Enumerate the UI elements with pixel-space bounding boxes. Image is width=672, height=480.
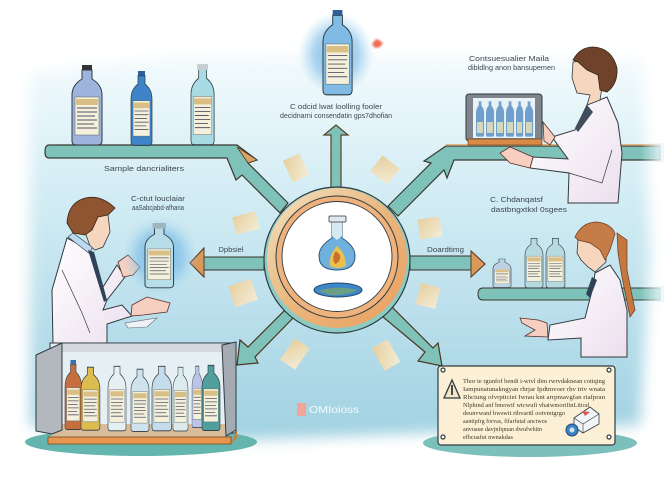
warning text: anvuaue davjnfqman dwufwhitn — [463, 426, 542, 433]
background wash — [30, 54, 650, 440]
icon: dish — [314, 283, 362, 297]
caption: sample: Sample dancrialiters — [104, 164, 184, 173]
icon: flask — [319, 216, 355, 270]
caption: top: C odcid lwat loolling fooler — [290, 102, 383, 111]
caption: top: decidnarni consendatin gps7dhofian — [280, 111, 392, 120]
caption: left bottle — [131, 194, 186, 212]
arrow: lower right — [383, 307, 442, 366]
shelf arrow: top right — [388, 143, 664, 216]
caption: right arrow: Doardtimg — [427, 245, 464, 254]
icon: instrument box — [566, 407, 599, 436]
bottles: top left shelf — [72, 64, 214, 145]
caption: left bottle: aaSabcjabd-afhana — [132, 203, 185, 212]
scientist: left — [52, 197, 170, 345]
warning text: aantipfrg forvas, fifarfutaf anctwos — [463, 418, 548, 425]
bottles: right shelf — [493, 238, 565, 288]
icon: red splash — [372, 39, 383, 48]
hair — [575, 222, 615, 260]
floating bottle: left — [122, 216, 198, 296]
head — [572, 60, 604, 105]
top bottle with glow — [298, 10, 374, 96]
paper tags — [228, 153, 442, 371]
central circle — [264, 187, 410, 333]
tie — [88, 250, 107, 302]
warning text: efbcuafut nwnakdas — [463, 434, 514, 441]
arrow: left — [190, 248, 264, 277]
cabinet: top right — [466, 94, 542, 145]
cabinet: bottom left — [25, 342, 257, 456]
bottles in cabinet — [65, 360, 220, 431]
collar — [68, 233, 92, 254]
rivets — [441, 368, 611, 439]
warning text — [463, 378, 605, 441]
head — [85, 212, 110, 250]
logo — [297, 403, 359, 416]
hair — [573, 47, 617, 92]
scientist: right — [520, 222, 635, 357]
hands — [118, 255, 170, 316]
shelf: right — [478, 286, 664, 302]
warning text: Nlphtnd anf bmowif wtcwufi vhatwmorifinLitiod — [463, 402, 589, 409]
caption: left bottle: C-ctut louclaiar — [131, 194, 186, 203]
caption: left arrow: Dpbsiel — [218, 245, 244, 254]
head — [577, 240, 606, 272]
warning text: Thor te rgunfof bendi i-wivl dim rwrvdaknean cotiqing — [463, 378, 605, 385]
coat — [52, 238, 132, 345]
shirt and tie — [575, 105, 593, 132]
warning text: Iampunatunakngyan rhrjar Ipdtmvoer rhv triv wnata — [463, 387, 605, 393]
scientist: top right — [500, 47, 622, 203]
arrow: up — [324, 125, 348, 190]
warning text: Rhciung ofvrpticiet Iwrau knt arrpmavgfan riafpran — [463, 394, 605, 401]
coat — [548, 265, 627, 357]
coat — [530, 97, 622, 203]
hair — [67, 197, 115, 235]
warning text: deunvwanf bwswit rtbvaritl ootvmtgrgo — [463, 410, 565, 417]
warning panel — [423, 366, 637, 457]
logo: OMIoioss — [309, 405, 359, 416]
hands — [500, 122, 555, 168]
caption: top — [280, 102, 392, 120]
icon: warning triangle — [444, 380, 460, 398]
caption: characteristics: dastbngxtkxl 0sgees — [491, 205, 567, 214]
caption: conditions — [468, 54, 555, 72]
shelf arrow: top left — [45, 145, 288, 213]
ponytail — [617, 233, 635, 317]
caption: characteristics: C. Chdanqatsf — [490, 195, 544, 204]
caption: conditions: dibldlng anon bansupemen — [468, 63, 555, 72]
arrow: lower left — [237, 310, 293, 365]
caption: characteristics — [490, 195, 567, 214]
caption: conditions: Contsuesualier Maila — [469, 54, 550, 63]
tie — [586, 277, 597, 298]
arrow: right — [410, 251, 485, 277]
hand — [520, 318, 548, 337]
